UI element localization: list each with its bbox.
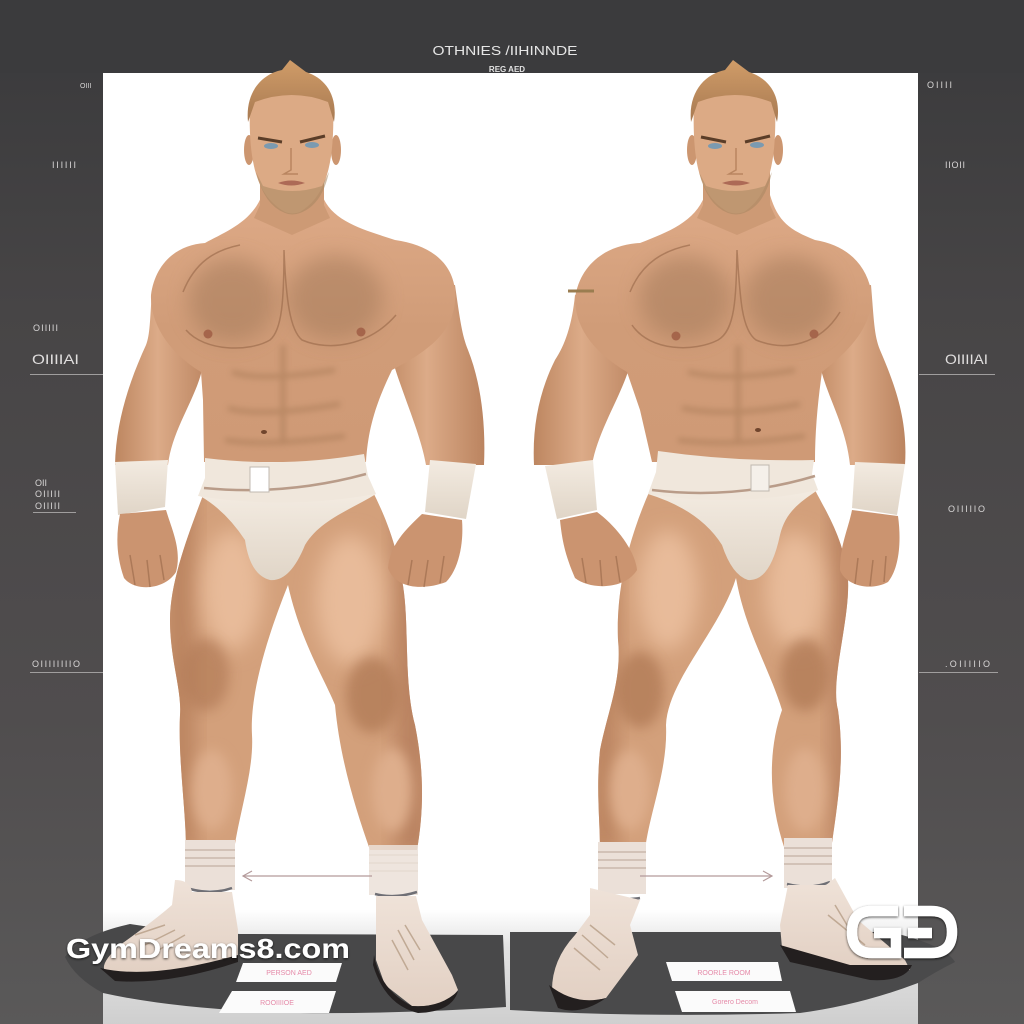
left figure: shoes bbox=[100, 880, 458, 1013]
width arrow right bbox=[640, 871, 772, 881]
left measurement labels bbox=[30, 83, 103, 672]
left figure: arms bbox=[115, 285, 484, 465]
title bbox=[432, 43, 578, 74]
left measurement labels: OII bbox=[35, 478, 47, 488]
right figure: shoes bbox=[549, 878, 912, 1010]
left measurement labels: OIIIIAI bbox=[32, 351, 79, 367]
left measurement labels: OIIIII bbox=[33, 323, 58, 333]
right figure bbox=[534, 60, 912, 1010]
left figure: fists bbox=[117, 510, 462, 587]
left measurement labels: OIIIII bbox=[35, 489, 60, 499]
title: REG AED bbox=[489, 65, 525, 74]
right figure: socks bbox=[592, 838, 832, 899]
width arrow left bbox=[243, 871, 372, 881]
right measurement labels: IIOII bbox=[945, 160, 965, 170]
right figure: fists bbox=[560, 510, 900, 587]
watermark: logo bbox=[852, 911, 952, 953]
top band bbox=[0, 0, 1024, 73]
left measurement labels: OIII bbox=[80, 83, 91, 90]
left figure: legs bbox=[165, 485, 430, 855]
right figure: chest and abdominal muscles bbox=[630, 245, 840, 445]
right figure: legs bbox=[598, 492, 848, 847]
left figure: briefs bbox=[198, 454, 376, 580]
right figure: arm mark bbox=[568, 290, 594, 292]
left measurement labels: OIIIII bbox=[35, 501, 60, 511]
right measurement labels: OIIIIAI bbox=[945, 351, 988, 367]
floor cards left: PERSON AED bbox=[266, 970, 312, 977]
right measurement labels: OIIIIIO bbox=[948, 504, 985, 514]
left figure bbox=[100, 60, 484, 1013]
right figure: briefs bbox=[648, 451, 818, 580]
white backdrop panel bbox=[103, 73, 918, 1024]
floor platforms bbox=[65, 924, 955, 1015]
right figure: arms bbox=[534, 285, 905, 465]
right figure: neck and head bbox=[687, 60, 783, 235]
right figure: torso bbox=[575, 195, 871, 462]
title: OTHNIES /IIHINNDE bbox=[432, 43, 578, 58]
left figure: torso bbox=[151, 195, 455, 462]
right measurement labels: .OIIIIIO bbox=[945, 659, 990, 669]
watermark: site name: GymDreams8.com bbox=[66, 933, 350, 964]
right figure: wristbands bbox=[545, 460, 905, 519]
left figure: wristbands bbox=[115, 460, 476, 519]
left measurement labels: IIIIII bbox=[52, 160, 76, 170]
floor cards left bbox=[219, 963, 342, 1013]
right measurement labels bbox=[919, 80, 998, 672]
left figure: socks bbox=[185, 840, 418, 896]
floor cards left: ROOIIIIOE bbox=[260, 1000, 294, 1007]
left figure: neck and head bbox=[244, 60, 341, 235]
left measurement labels: OIIIIIIIIO bbox=[32, 659, 80, 669]
right measurement labels: OIIII bbox=[927, 80, 952, 90]
floor cards right: ROORLE ROOM bbox=[697, 970, 751, 977]
floor cards right: Gorero Decom bbox=[712, 999, 758, 1006]
floor cards right bbox=[666, 962, 796, 1012]
left figure: chest and abdominal muscles bbox=[183, 245, 396, 445]
